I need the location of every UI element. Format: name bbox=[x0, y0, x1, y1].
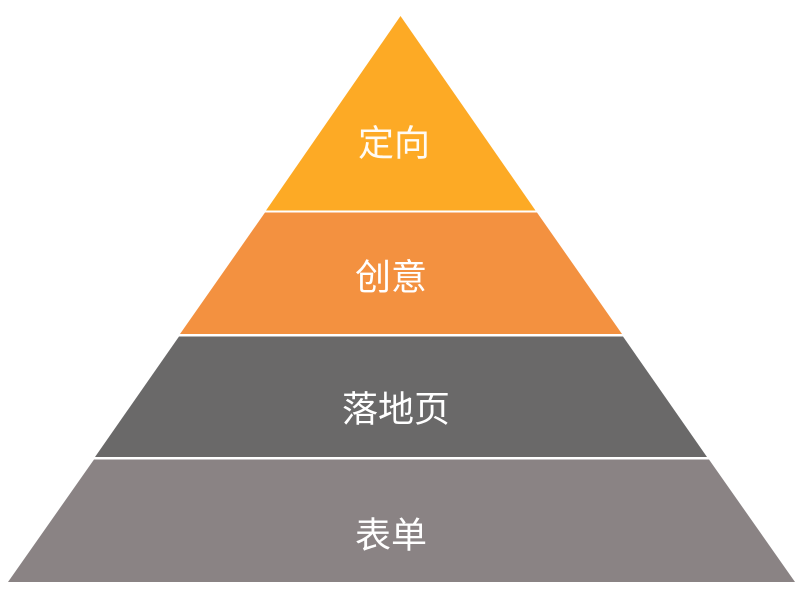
tier 2: 创意 bbox=[180, 212, 622, 334]
tier 4: 表单 bbox=[8, 460, 795, 582]
label: 定向: 定向 bbox=[358, 122, 430, 164]
label: 创意: 创意 bbox=[355, 256, 427, 298]
label: 表单: 表单 bbox=[355, 514, 427, 556]
tier 1: 定向 bbox=[266, 16, 536, 210]
tier 3: 落地页 bbox=[95, 336, 707, 457]
label: 落地页: 落地页 bbox=[342, 388, 450, 430]
